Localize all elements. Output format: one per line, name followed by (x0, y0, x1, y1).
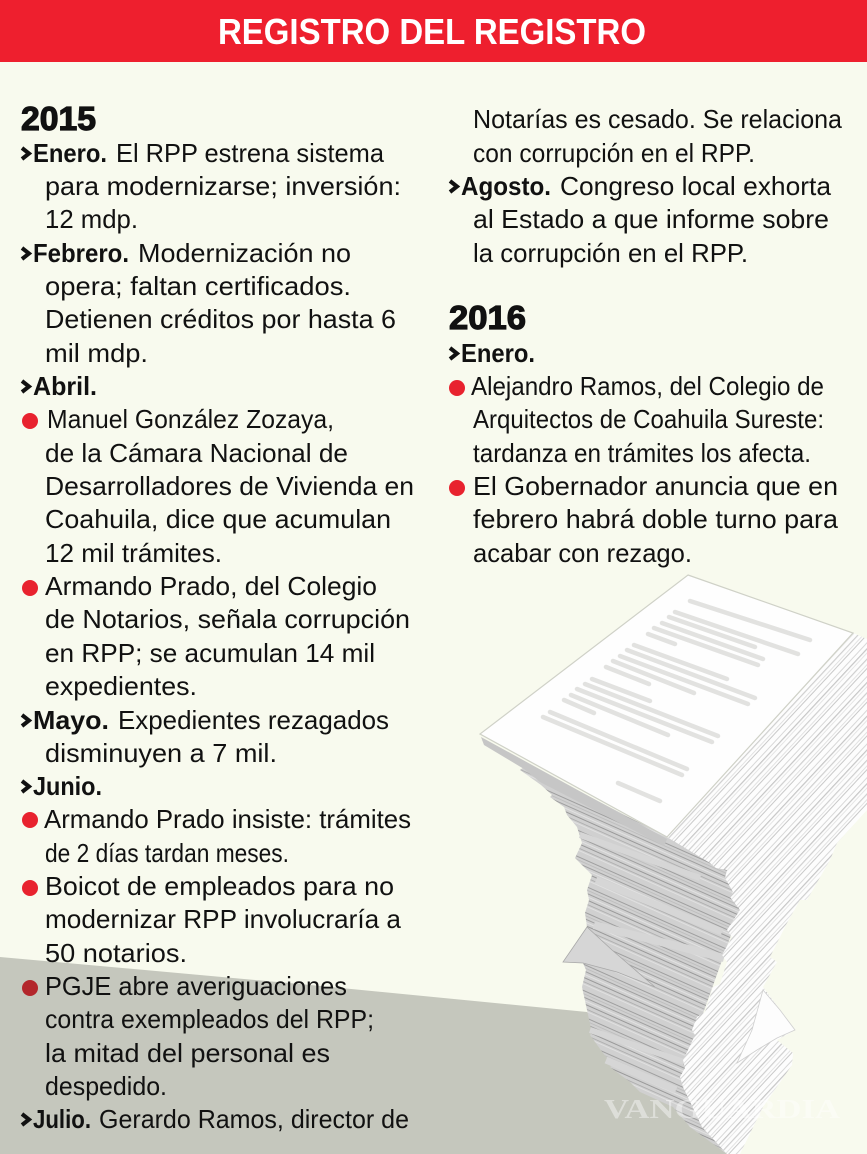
pile left face (481, 740, 740, 1154)
loose sheet right (737, 990, 795, 1063)
entry: Agosto: Agosto. (461, 171, 551, 201)
item: Manuel González Zozaya: Coahuila, dice que acumulan (45, 504, 391, 534)
title banner (0, 0, 867, 62)
entry: Julio: Notarías es cesado. Se relaciona (473, 104, 843, 134)
item: PGJE: despedido. (45, 1071, 167, 1101)
entry: Mayo (22, 705, 389, 768)
entry: Enero 2015 (22, 138, 401, 234)
entry: Febrero (22, 238, 396, 368)
item: Armando Prado: de Notarios, señala corrupción (45, 604, 410, 634)
entry: Febrero: mil mdp. (45, 338, 148, 368)
entry: Julio: con corrupción en el RPP. (473, 138, 755, 168)
item: Boicot (22, 871, 402, 968)
item: Armando Prado: en RPP; se acumulan 14 mil (45, 638, 375, 668)
item: Manuel González Zozaya: 12 mil trámites. (45, 538, 222, 568)
item: Alejandro Ramos: Alejandro Ramos, del Colegio de (471, 371, 824, 401)
top page text lines (543, 601, 810, 801)
entry: Febrero: opera; faltan certificados. (45, 271, 351, 301)
entry: Mayo: Expedientes rezagados (118, 705, 389, 735)
item: Boicot: 50 notarios. (45, 938, 187, 968)
entry: Mayo: disminuyen a 7 mil. (45, 738, 277, 768)
item: Boicot: modernizar RPP involucraría a (45, 904, 402, 934)
entry: Agosto (450, 171, 832, 268)
entry: Febrero: Modernización no (138, 238, 351, 268)
entry: Febrero: Febrero. (33, 238, 129, 268)
item: El Gobernador (449, 471, 839, 568)
item: Armando Prado (22, 571, 410, 701)
heading: 2016: 2016 (449, 299, 526, 336)
entry: Enero 2015: El RPP estrena sistema (116, 138, 385, 168)
item: Armando Prado: expedientes. (45, 671, 197, 701)
item: Alejandro Ramos (449, 371, 824, 468)
item: Armando Prado insiste: Armando Prado insiste: trámites (44, 804, 411, 834)
entry: Enero 2015: Enero. (33, 138, 107, 168)
item: Armando Prado: Armando Prado, del Colegio (45, 571, 377, 601)
illustration: stack of papers (480, 575, 867, 1154)
title banner: REGISTRO DEL REGISTRO (218, 11, 646, 52)
entry: Agosto: Congreso local exhorta (560, 171, 832, 201)
entry: Enero 2015: 12 mdp. (45, 204, 138, 234)
entry: Agosto: la corrupción en el RPP. (473, 238, 748, 268)
item: PGJE: la mitad del personal es (45, 1038, 330, 1068)
entry: Abril: Abril. (33, 371, 97, 401)
item: PGJE (22, 971, 374, 1101)
item: Alejandro Ramos: Arquitectos de Coahuila Sureste: (473, 404, 824, 434)
item: Manuel González Zozaya (22, 404, 414, 568)
entry: Julio: Julio. (33, 1104, 91, 1134)
ground shadow (0, 957, 740, 1154)
page shadow edge (481, 737, 667, 846)
item: PGJE: PGJE abre averiguaciones (45, 971, 347, 1001)
item: Armando Prado insiste: de 2 días tardan meses. (45, 838, 289, 868)
item: Manuel González Zozaya: de la Cámara Nacional de (45, 438, 348, 468)
item: Manuel González Zozaya: Manuel González Zozaya, (47, 404, 334, 434)
item: El Gobernador: febrero habrá doble turno para (473, 504, 839, 534)
entry: Julio: Gerardo Ramos, director de (99, 1104, 409, 1134)
entry: Enero 2015: para modernizarse; inversión: (45, 171, 401, 201)
top page (480, 575, 853, 837)
entry: Junio: Junio. (33, 771, 102, 801)
entry: Febrero: Detienen créditos por hasta 6 (45, 304, 396, 334)
pile right face (667, 633, 867, 1154)
loose sheet left (563, 927, 655, 987)
item: Armando Prado insiste (22, 804, 411, 868)
item: Alejandro Ramos: tardanza en trámites los afecta. (473, 438, 811, 468)
lighter sheets (580, 835, 724, 1090)
entry: Agosto: al Estado a que informe sobre (473, 204, 829, 234)
item: Boicot: Boicot de empleados para no (45, 871, 394, 901)
entry: Mayo: Mayo. (33, 705, 109, 735)
heading: 2015: 2015 (21, 100, 96, 137)
item: El Gobernador: El Gobernador anuncia que en (473, 471, 838, 501)
watermark: VANGUARDIA (604, 1094, 841, 1124)
item: Manuel González Zozaya: Desarrolladores de Vivienda en (45, 471, 414, 501)
item: PGJE: contra exempleados del RPP; (45, 1004, 374, 1034)
entry: Enero 2016: Enero. (461, 338, 535, 368)
item: El Gobernador: acabar con rezago. (473, 538, 692, 568)
